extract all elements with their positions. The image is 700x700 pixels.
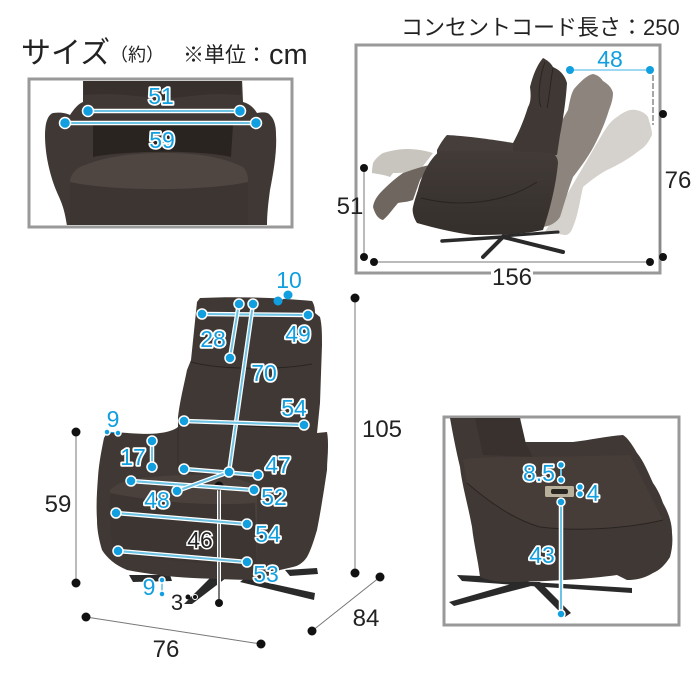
- panel: side reclining: [337, 45, 691, 291]
- dimension: 48 seat depth: [144, 467, 234, 513]
- dimension: 47: 47: [265, 452, 291, 478]
- dimension: 3: [171, 590, 198, 615]
- chair front close-up: [45, 78, 276, 226]
- title: ※単位：: [183, 44, 267, 67]
- dimension: 59: [60, 118, 262, 153]
- ghost: raised footrest dark: [373, 165, 430, 220]
- dimension: 52: [126, 476, 287, 510]
- dimension: 76 height: 76: [665, 167, 691, 194]
- dimension: 84 depth: [308, 572, 384, 636]
- seat: [110, 475, 257, 567]
- dimension: 17: 17: [120, 444, 146, 470]
- dimension: 9 arm: 9: [107, 406, 119, 432]
- back: [510, 58, 567, 155]
- dimension: 84 depth: 84: [353, 605, 379, 632]
- dimension: 48: [566, 46, 654, 125]
- dimension: 8.5: 8.5: [523, 460, 555, 486]
- dimension: 70: 70: [251, 360, 277, 386]
- dimension: 70: [229, 299, 277, 472]
- dimension: 47: [179, 452, 291, 480]
- dimension: 54 back: [179, 395, 309, 430]
- dimension: 43: 43: [529, 542, 555, 568]
- ghost: half reclined back: [543, 74, 613, 227]
- headrest seam: [191, 362, 312, 368]
- panel: front top detail: [29, 78, 292, 227]
- main chair illustration: [97, 297, 328, 604]
- dimension: 9 arm: [104, 406, 121, 436]
- swivel base: [129, 568, 318, 604]
- dimension: 156: [370, 258, 654, 291]
- dimension: 17: [120, 436, 157, 472]
- title: [21, 37, 308, 71]
- swivel base: [449, 575, 632, 617]
- dimension: 52: 52: [261, 484, 287, 510]
- dimension: 46 seat height: 46: [187, 527, 213, 553]
- dimension: 10: [274, 267, 302, 306]
- dimension: 53: 53: [253, 561, 279, 587]
- side chair close-up: [450, 418, 672, 582]
- ghost: fully reclined back: [545, 110, 652, 235]
- dimension: 76 width: [82, 612, 266, 663]
- title: サイズ: [21, 37, 110, 70]
- chair body: [97, 297, 328, 580]
- dimension: 51 seat height: 51: [337, 193, 363, 220]
- seat top: [437, 135, 513, 155]
- dimension: 4: 4: [587, 480, 600, 506]
- dimension: 3: 3: [171, 590, 183, 615]
- panel: socket detail: [444, 417, 679, 625]
- dimension: 51: [82, 83, 246, 116]
- dimension: 156: 156: [492, 264, 532, 291]
- dimension: 49: 49: [285, 321, 311, 347]
- dimension: 59 arm height: [45, 428, 80, 588]
- dimension: 28: [200, 299, 244, 363]
- dimension: 105: [350, 294, 402, 578]
- recliner main: [413, 58, 567, 257]
- dimension: 59 arm height: 59: [45, 491, 71, 518]
- ghost: raised footrest light: [372, 149, 433, 177]
- dimension: 59: 59: [149, 127, 175, 153]
- dimension: 53: [113, 546, 279, 587]
- dimension: 54 seat front: [111, 508, 281, 547]
- dimension: 46 seat height: [187, 482, 224, 607]
- dimension: 9 base: 9: [143, 574, 155, 600]
- title: cm: [269, 39, 308, 71]
- dimension: 4: [576, 480, 600, 506]
- dimension: 54 seat front: 54: [255, 521, 281, 547]
- swivel base: [442, 232, 563, 257]
- arm: [413, 151, 558, 235]
- dimension: 54 back: 54: [281, 395, 307, 421]
- dimension: 49: [197, 309, 313, 347]
- dimension: 76 height: [659, 110, 691, 261]
- dimension: 76 width: 76: [153, 636, 179, 663]
- dimension: 48: 48: [597, 46, 623, 72]
- dimension: 48 seat depth: 48: [144, 487, 170, 513]
- dimension: 43: [529, 498, 565, 618]
- cord length note: コンセントコード長さ：250: [401, 15, 680, 40]
- dimension: 9 base: [143, 574, 165, 600]
- dimension: 105: 105: [362, 416, 402, 443]
- dimension: 28: 28: [200, 326, 226, 352]
- dimension: 51 seat height: [337, 164, 368, 261]
- dimension: 10: 10: [276, 267, 302, 293]
- backrest seam: [178, 420, 305, 428]
- socket: [545, 486, 574, 497]
- dimension: 51: 51: [148, 83, 174, 109]
- title: （約）: [110, 45, 164, 65]
